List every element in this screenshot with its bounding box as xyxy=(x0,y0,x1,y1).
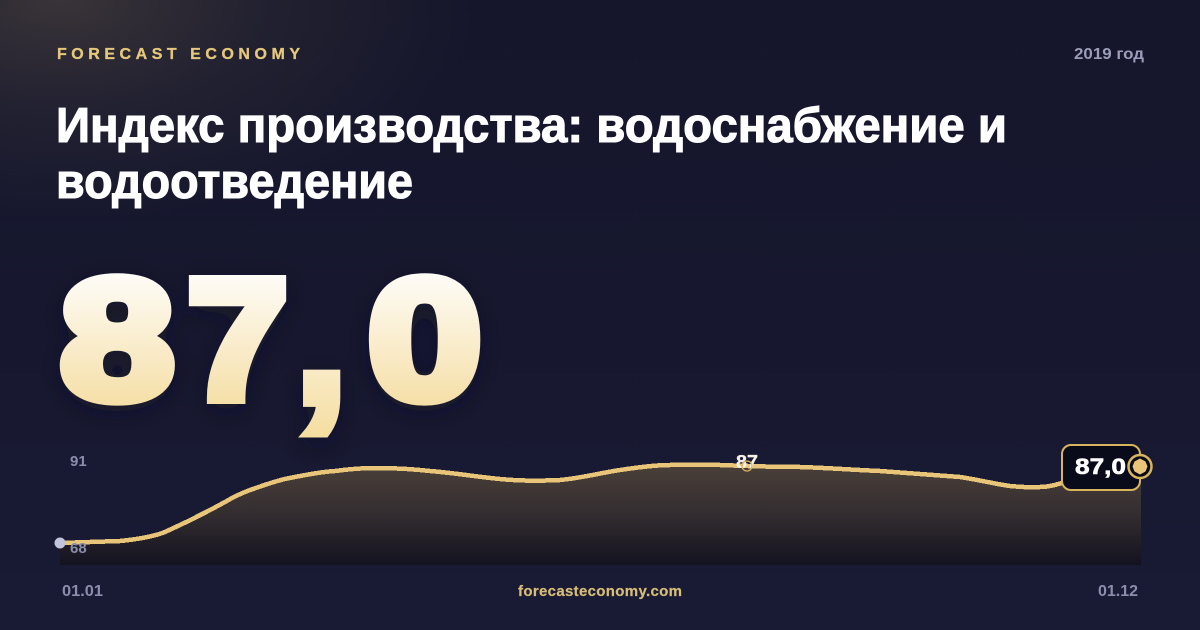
chart xyxy=(54,445,1152,565)
current value callout: 87,0 xyxy=(1075,454,1126,479)
axis label: minimum: 68 xyxy=(70,540,87,557)
title: водоотведение xyxy=(56,155,413,209)
title: Индекс производства: водоснабжение и xyxy=(56,99,1007,153)
big value 87,0: 7 xyxy=(188,245,288,435)
end date label: 01.12 xyxy=(1098,583,1138,600)
axis label: maximum: 91 xyxy=(70,453,87,470)
big value 87,0: 8 xyxy=(60,244,174,434)
chart line xyxy=(60,465,1140,543)
title xyxy=(56,99,1007,209)
current point marker xyxy=(1128,455,1152,478)
mid point label: 87 xyxy=(736,452,758,472)
start date label: 01.01 xyxy=(62,583,103,600)
big value 87,0: , xyxy=(293,224,350,445)
chart area fill xyxy=(60,465,1141,565)
current value callout xyxy=(1062,445,1140,490)
big value 87,0: 0 xyxy=(368,244,481,434)
big value 87,0 xyxy=(60,224,481,445)
source url: forecasteconomy.com xyxy=(518,583,682,600)
start point marker xyxy=(54,538,66,548)
year label: 2019 год xyxy=(1074,46,1144,63)
brand label: FORECAST ECONOMY xyxy=(57,46,300,63)
